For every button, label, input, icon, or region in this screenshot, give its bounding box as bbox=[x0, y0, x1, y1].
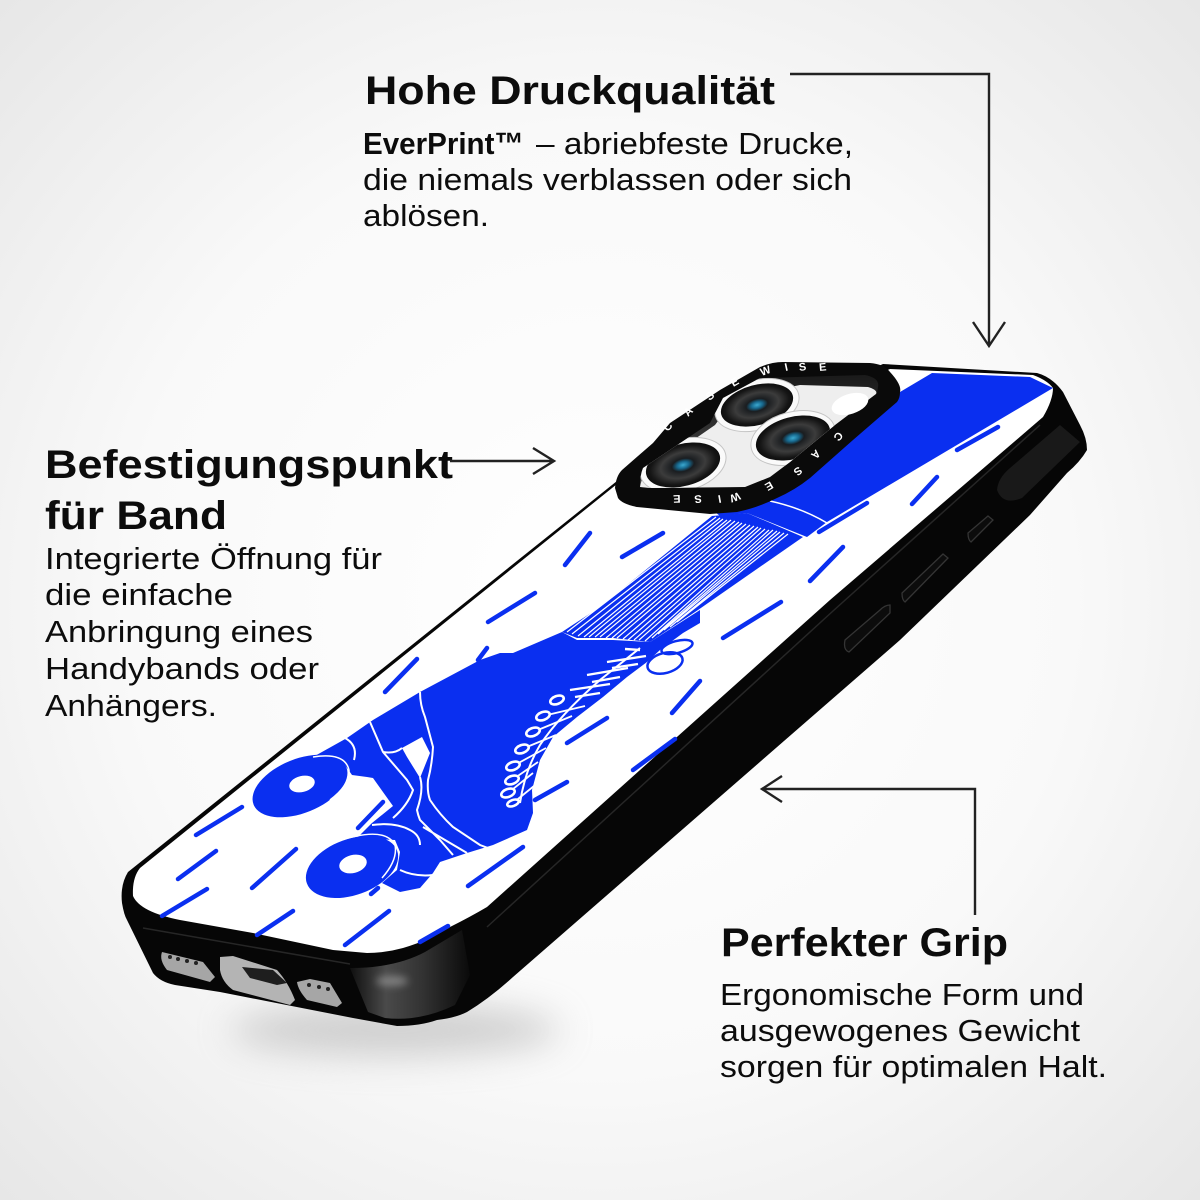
camera surround bbox=[615, 361, 900, 514]
right speaker bbox=[297, 979, 342, 1007]
boot outlines bbox=[345, 692, 488, 875]
wheel: rear bbox=[244, 742, 356, 830]
body text: Integrierte Öffnung für bbox=[45, 541, 382, 576]
striped sock bbox=[562, 513, 803, 642]
body text: ausgewogenes Gewicht bbox=[720, 1013, 1080, 1048]
eyelets bbox=[500, 694, 565, 808]
phone shadow bbox=[230, 1004, 560, 1056]
wheel: front bbox=[297, 824, 407, 910]
heading bbox=[45, 443, 453, 538]
body text: Anhängers. bbox=[45, 688, 217, 723]
lens: right bbox=[750, 410, 834, 466]
camera window bbox=[640, 385, 876, 488]
speed dashes bbox=[162, 427, 998, 945]
arrow: strap attachment bbox=[450, 448, 554, 474]
roller skate bbox=[244, 513, 803, 910]
callout: Perfekter Grip bbox=[720, 921, 1107, 1084]
arrow: grip bbox=[762, 776, 975, 915]
body text bbox=[45, 541, 382, 723]
flash bbox=[829, 389, 871, 419]
body text: die einfache bbox=[45, 577, 233, 612]
rim lines bbox=[143, 425, 1040, 964]
body text: Anbringung eines bbox=[45, 614, 313, 649]
camera ring lettering lower: CASEWISE bbox=[673, 429, 845, 505]
lenses bbox=[640, 378, 834, 488]
body text: – abriebfeste Drucke, bbox=[536, 126, 853, 161]
body text: die niemals verblassen oder sich bbox=[363, 162, 852, 197]
heading: Befestigungspunkt bbox=[45, 443, 453, 487]
body text: Ergonomische Form und bbox=[720, 977, 1084, 1012]
blue sock band bbox=[700, 373, 1053, 537]
charging port bbox=[220, 956, 295, 1005]
laces bbox=[508, 648, 646, 803]
heading: Hohe Druckqualität bbox=[365, 69, 775, 113]
bottom ports bbox=[161, 952, 342, 1007]
body text: EverPrint™ bbox=[363, 126, 524, 161]
body text: ablösen. bbox=[363, 198, 489, 233]
case body bbox=[122, 364, 1087, 1026]
heading: Perfekter Grip bbox=[721, 921, 1008, 965]
camera ring lettering: CASEWISE bbox=[661, 361, 827, 434]
camera bevel bbox=[640, 375, 878, 488]
body text bbox=[363, 126, 853, 233]
body text: Handybands oder bbox=[45, 651, 319, 686]
lens: top bbox=[714, 378, 800, 432]
printed back bbox=[133, 369, 1053, 953]
lace loops bbox=[645, 637, 694, 677]
lens: left bbox=[640, 436, 726, 488]
arrow: print quality bbox=[790, 74, 1005, 346]
callout: Hohe Druckqualitaet bbox=[363, 69, 853, 233]
body text bbox=[720, 977, 1107, 1084]
white gap at heel bbox=[402, 737, 430, 778]
side grip bbox=[997, 425, 1080, 501]
callout: Befestigungspunkt bbox=[45, 443, 453, 723]
heading: für Band bbox=[45, 494, 227, 538]
body text: sorgen für optimalen Halt. bbox=[720, 1049, 1107, 1084]
boot bbox=[313, 610, 700, 892]
corner highlight bbox=[350, 930, 470, 1019]
side buttons bbox=[844, 516, 993, 652]
left speaker bbox=[161, 952, 215, 982]
phone case bbox=[122, 361, 1087, 1026]
